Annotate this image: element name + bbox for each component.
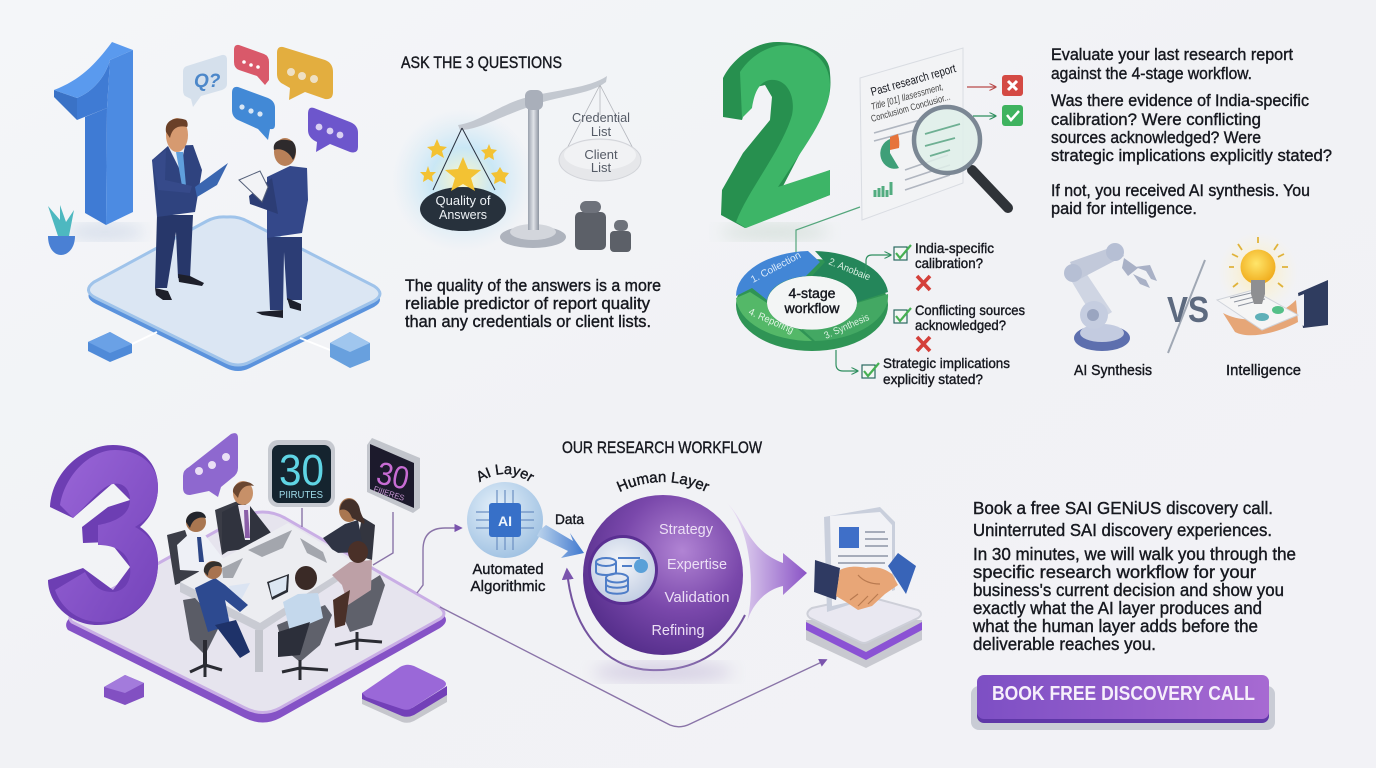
text: book a discovery call: specific research workflow for your xyxy=(973,562,1256,582)
check: conflicting sources xyxy=(894,302,1025,333)
glow behind stars xyxy=(391,108,535,252)
bubble: question xyxy=(183,55,227,107)
workflow diagram xyxy=(467,464,922,684)
small cube xyxy=(104,675,144,705)
text: book a discovery call: Uninterruted SAI discovery experiences. xyxy=(973,520,1272,540)
ai layer: AI Layer xyxy=(478,464,534,482)
human layer sphere: Human Layer xyxy=(616,472,710,492)
left pan with quality label: Quality of xyxy=(436,193,491,208)
text: book a discovery call: deliverable reaches you. xyxy=(973,634,1156,654)
stage: analysis: 2. Anobaie xyxy=(827,257,872,283)
right pan: List xyxy=(591,160,612,175)
right pan: Client xyxy=(584,147,618,162)
arrow: human output xyxy=(727,503,807,622)
number 2 xyxy=(720,42,830,240)
man with tablet xyxy=(152,118,228,300)
bubble: purple xyxy=(308,108,358,152)
bubble: blue xyxy=(232,87,275,140)
left pan with quality label: Answers xyxy=(439,207,487,222)
past research report document: Past research report xyxy=(869,61,958,99)
arrow: feedback loop xyxy=(567,570,745,670)
deliverable document with handshake xyxy=(806,507,922,668)
timer screen 1: 30 xyxy=(279,446,324,495)
person: right woman xyxy=(332,541,372,628)
ai layer xyxy=(467,464,543,558)
person: back left man xyxy=(177,512,228,572)
text: book a discovery call: Book a free SAI GENiUS discovery call. xyxy=(973,498,1273,518)
chair: right xyxy=(335,575,385,650)
speech bubbles xyxy=(183,45,358,152)
past research report document: Conclusiom Conclusior... xyxy=(870,92,952,125)
text: book a discovery call: business's current decision and show you xyxy=(973,580,1284,600)
text: book a discovery call: exactly what the AI layer produces and xyxy=(973,598,1262,618)
icon: database xyxy=(596,558,640,594)
text: evaluate your last report: sources acknowledged? Were xyxy=(1051,128,1261,147)
text: evaluate your last report: paid for intelligence. xyxy=(1051,199,1197,218)
check: strategic implications: explicitiy stated? xyxy=(883,371,983,387)
chair: front centre xyxy=(277,605,332,680)
text: quality of answers statement: reliable predictor of report quality xyxy=(405,294,650,313)
comparison: ai synthesis vs intelligence xyxy=(1064,232,1328,379)
timer screen 1: PIIRUTES xyxy=(279,490,323,501)
number 3 xyxy=(48,445,158,625)
connector cubes xyxy=(88,332,370,368)
check: india-specific: India-specific xyxy=(915,240,994,256)
check: india-specific: calibration? xyxy=(915,255,983,271)
text: evaluate your last report xyxy=(1051,45,1332,218)
text: evaluate your last report: Evaluate your last research report xyxy=(1051,45,1293,64)
report verdict icons xyxy=(967,75,1023,126)
human layer sphere: Expertise xyxy=(667,556,727,573)
human layer sphere: Strategy xyxy=(659,521,713,538)
label: automated algorithmic: Automated xyxy=(472,561,544,578)
ai layer: AI xyxy=(498,513,512,529)
stage: reporting xyxy=(736,292,812,341)
past research report document: Title [01] Ilasessment, xyxy=(870,82,945,113)
check: conflicting sources: acknowledged? xyxy=(915,317,1006,333)
person: back right woman xyxy=(323,498,365,553)
4-stage workflow ring xyxy=(736,250,888,351)
handshake xyxy=(814,553,916,610)
checklist xyxy=(836,240,1025,387)
stage: synthesis xyxy=(802,294,888,342)
person: front left man xyxy=(195,561,250,658)
label: automated algorithmic xyxy=(470,561,546,595)
text: evaluate your last report: strategic implications explicitly stated? xyxy=(1051,146,1332,165)
text: book a discovery call xyxy=(972,498,1296,654)
scale stand and beam xyxy=(458,76,607,248)
balance scale illustration xyxy=(391,76,641,252)
stage: reporting: 4. Reporing xyxy=(747,307,795,336)
text: evaluate your last report: against the 4-stage workflow. xyxy=(1051,64,1252,83)
back chairs xyxy=(167,500,375,585)
check: strategic implications xyxy=(836,350,1010,387)
chair: front left xyxy=(183,598,222,677)
label: data: Data xyxy=(555,511,584,527)
4-stage workflow ring: workflow xyxy=(783,301,840,316)
label: ai synthesis: AI Synthesis xyxy=(1074,362,1152,379)
check: strategic implications: Strategic implications xyxy=(883,355,1010,371)
stage: collection xyxy=(736,250,820,300)
base platform xyxy=(806,596,922,668)
platform xyxy=(88,217,380,371)
right pan xyxy=(559,85,641,181)
stage: collection: 1. Collection xyxy=(749,250,803,286)
label: automated algorithmic: Algorithmic xyxy=(470,578,546,595)
text: evaluate your last report: If not, you received AI synthesis. You xyxy=(1051,181,1310,200)
bubble: question: Q? xyxy=(194,71,221,92)
stars xyxy=(420,139,509,191)
timer screen 2: FIIIERES xyxy=(372,484,406,503)
text: quality of answers statement: The quality of the answers is a more xyxy=(405,276,661,295)
human layer sphere: Refining xyxy=(652,622,704,639)
panel: step 3 illustration xyxy=(48,433,826,727)
check: india-specific xyxy=(866,240,994,272)
large block xyxy=(362,665,447,723)
stage: analysis xyxy=(812,251,888,302)
stage: synthesis: 3. Synthesis xyxy=(823,312,871,342)
document xyxy=(824,507,895,612)
left pan with quality label xyxy=(420,128,506,231)
icon: light bulb on hand xyxy=(1217,232,1328,335)
speech bubble xyxy=(183,433,238,497)
connector lines xyxy=(302,508,826,727)
vs divider: VS xyxy=(1167,289,1209,330)
laptops xyxy=(222,530,327,602)
cross 1 xyxy=(917,276,930,290)
human layer sphere xyxy=(583,472,743,684)
icon: robot arm xyxy=(1064,243,1157,351)
text: book a discovery call: what the human layer adds before the xyxy=(972,616,1258,636)
right pan: Credential xyxy=(572,110,630,125)
number 1 xyxy=(54,42,145,240)
connector: report to ring xyxy=(796,207,860,252)
vs divider xyxy=(1167,260,1209,353)
icon: potted plant xyxy=(48,205,75,255)
check: conflicting sources: Conflicting sources xyxy=(915,302,1025,318)
person: front centre woman xyxy=(278,566,323,657)
arrow: data to human layer xyxy=(537,525,584,558)
bubble: red xyxy=(234,45,269,85)
heading: ask the 3 questions: ASK THE 3 QUESTIONS xyxy=(401,53,562,72)
person: back centre man xyxy=(222,481,272,552)
heading: our research workflow: OUR RESEARCH WORKFLOW xyxy=(562,438,762,457)
button: book free discovery call: BOOK FREE DISCOVERY CALL xyxy=(992,683,1255,705)
label: intelligence: Intelligence xyxy=(1226,362,1301,379)
bubble: yellow xyxy=(277,47,333,100)
text: evaluate your last report: Was there evidence of India-specific xyxy=(1051,91,1309,110)
magnifying glass xyxy=(914,107,1008,208)
text: evaluate your last report: calibration? Were conflicting xyxy=(1051,110,1261,129)
text: book a discovery call: In 30 minutes, we will walk you through the xyxy=(973,544,1296,564)
weights xyxy=(575,201,631,252)
man with clipboard xyxy=(239,138,308,318)
text: quality of answers statement xyxy=(405,276,661,331)
timer screen 2 xyxy=(367,438,420,513)
timer screen 2: 30 xyxy=(374,455,412,497)
panel: step 1 illustration xyxy=(48,42,380,371)
4-stage workflow ring: 4-stage xyxy=(788,286,836,301)
text: quality of answers statement: than any credentials or client lists. xyxy=(405,312,651,331)
button: book free discovery call xyxy=(971,675,1275,730)
right pan: List xyxy=(591,124,612,139)
human layer sphere: Validation xyxy=(664,589,730,606)
past research report document xyxy=(860,48,963,220)
table xyxy=(180,523,355,623)
cross 2 xyxy=(917,337,930,351)
panel: step 2 illustration xyxy=(720,42,1025,387)
meeting table with team xyxy=(167,481,385,680)
timer screen 1 xyxy=(268,440,335,507)
platform xyxy=(66,512,446,722)
